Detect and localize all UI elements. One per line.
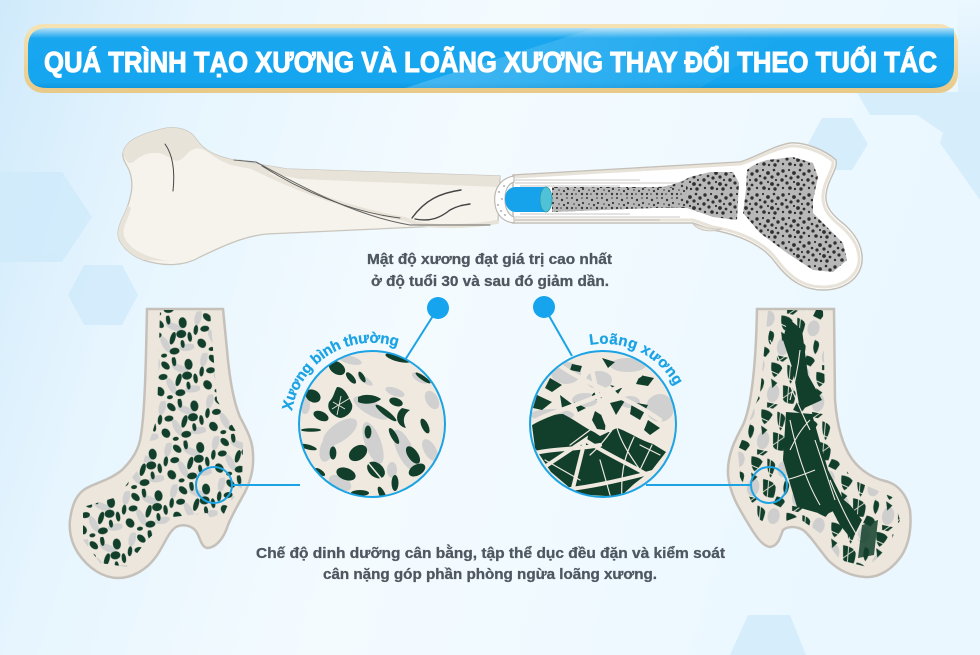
trabecular pattern (738, 310, 900, 567)
osteoporotic bone section (728, 309, 911, 577)
caption top: Mật độ xương đạt giá trị cao nhất (367, 252, 612, 268)
connector dot right (533, 296, 555, 318)
trabecular pattern (83, 310, 243, 567)
curved label: normal bone: Xương bình thường (282, 332, 399, 412)
magnified osteoporotic bone (527, 351, 676, 500)
caption top: ở độ tuổi 30 và sau đó giảm dần. (371, 274, 609, 290)
marrow fibres (515, 180, 680, 220)
whole femur illustration (118, 128, 862, 290)
magnified normal bone (299, 351, 445, 503)
curved label: osteoporosis: Loãng xương (589, 333, 682, 386)
femur outer shaft: intact left part (118, 128, 500, 265)
caption top (367, 252, 612, 290)
large dark cavity (770, 318, 878, 558)
caption bottom (256, 544, 725, 583)
spongy bone: shaft and neck (552, 172, 739, 220)
fracture lines (165, 144, 497, 226)
blue marrow cylinder (505, 187, 546, 212)
cutaway end cap (495, 176, 514, 223)
zoom ring (196, 467, 232, 503)
zoom ring (751, 467, 787, 503)
femur cutaway: right part (495, 143, 862, 290)
spongy bone: head (743, 157, 847, 272)
normal bone section (70, 309, 253, 578)
title banner (24, 24, 958, 93)
caption bottom: cân nặng góp phần phòng ngừa loãng xương. (323, 567, 657, 583)
caption bottom: Chế độ dinh dưỡng cân bằng, tập thể dục đều đặn và kiểm soát (256, 544, 725, 562)
connector dot left (427, 297, 449, 319)
connector lines and dots (232, 307, 751, 485)
